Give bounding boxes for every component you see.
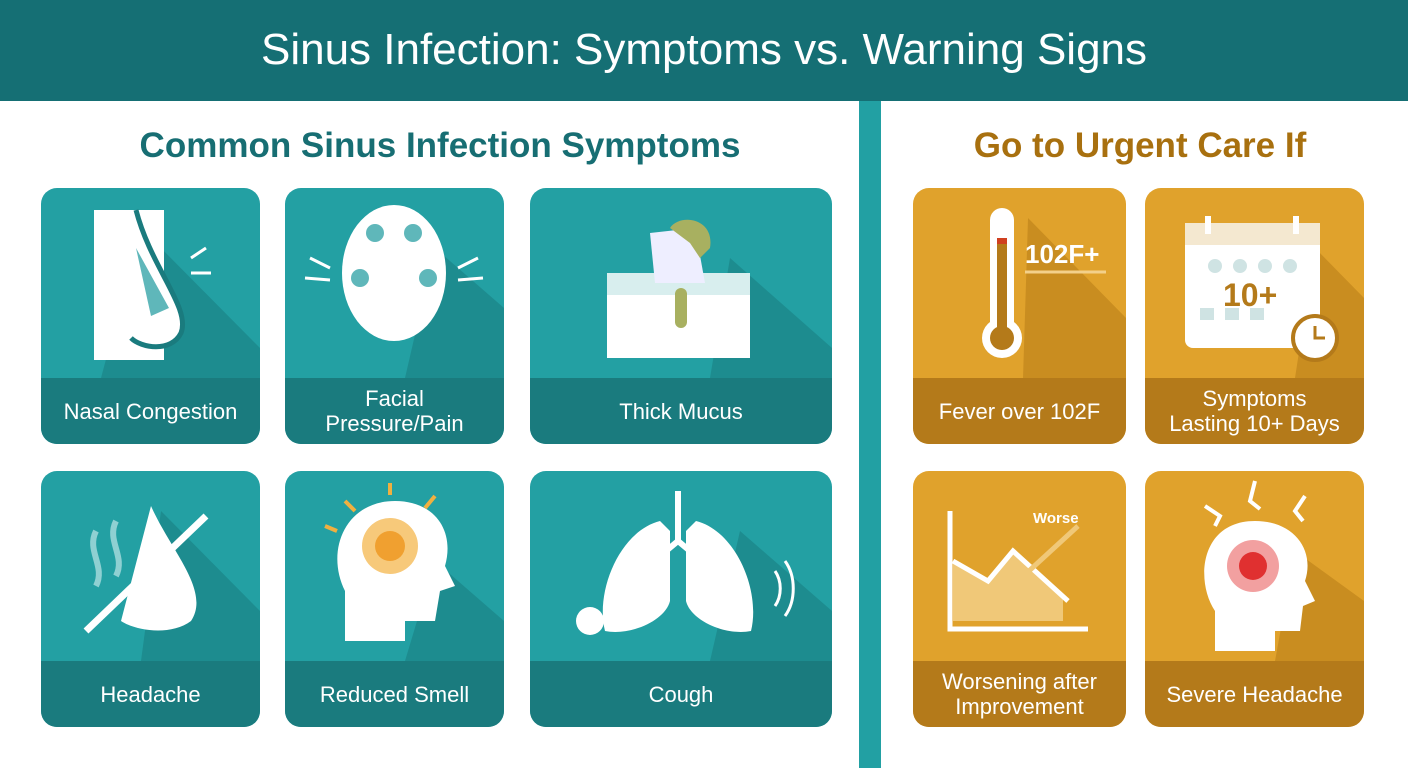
card: symptoms 10+ days: 10+ <box>1223 277 1277 313</box>
card: worsening <box>913 471 1126 727</box>
card: facial pressure <box>285 188 504 444</box>
card: cough <box>530 471 832 727</box>
heading: common symptoms: Common Sinus Infection Symptoms <box>140 126 740 165</box>
card: reduced smell: Reduced Smell <box>320 682 469 706</box>
card: worsening: Worsening after <box>942 669 1097 694</box>
card: facial pressure: Pressure/Pain <box>325 411 464 436</box>
heading: urgent care: Go to Urgent Care If <box>974 126 1306 165</box>
card: thick mucus: Thick Mucus <box>619 398 743 424</box>
card: symptoms 10+ days <box>1145 188 1364 444</box>
card: facial pressure: Facial <box>365 386 424 411</box>
card: worsening: Worse <box>1033 510 1079 527</box>
card: headache: Headache <box>100 682 201 706</box>
card: worsening: Improvement <box>955 694 1084 719</box>
title <box>0 0 1408 101</box>
card: severe headache <box>1145 471 1364 727</box>
card: severe headache: Severe Headache <box>1166 682 1343 706</box>
card: symptoms 10+ days: Symptoms <box>1203 386 1306 411</box>
card: symptoms 10+ days: Lasting 10+ Days <box>1169 411 1340 436</box>
card: thick mucus <box>530 188 832 444</box>
card: reduced smell <box>285 471 504 727</box>
card: fever: Fever over 102F <box>939 398 1100 424</box>
card: fever: 102F+ <box>1025 239 1099 269</box>
title: Sinus Infection: Symptoms vs. Warning Signs <box>261 25 1147 74</box>
card: nasal congestion: Nasal Congestion <box>64 398 237 424</box>
card: cough: Cough <box>649 682 713 706</box>
card: headache <box>41 471 260 727</box>
card: fever <box>913 188 1126 444</box>
card: nasal congestion <box>41 188 260 444</box>
